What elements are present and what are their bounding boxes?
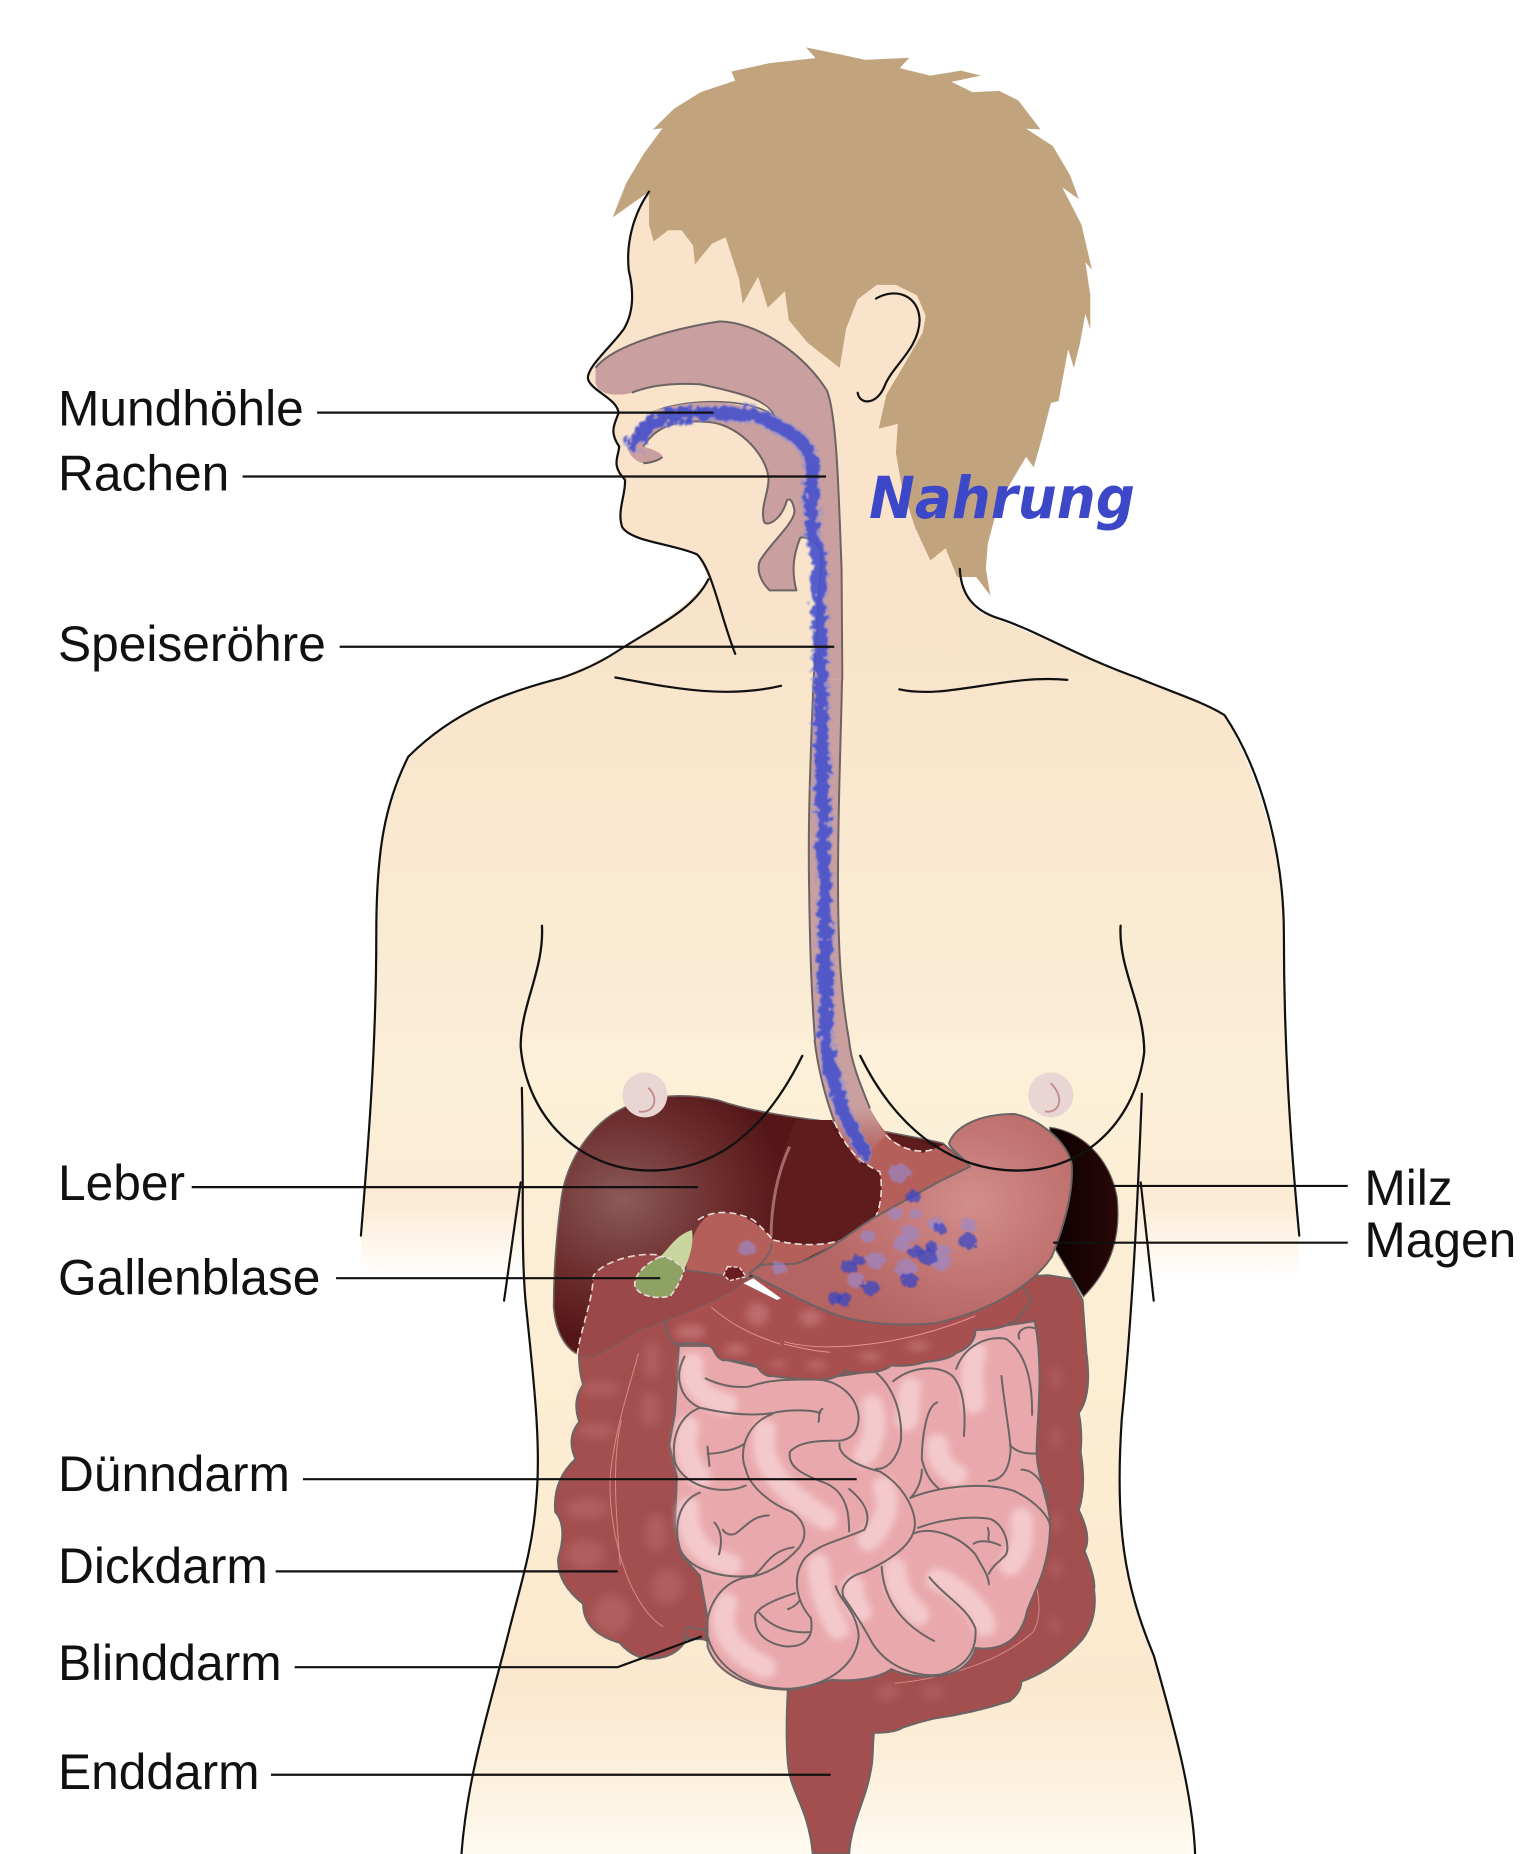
label: Blinddarm: Blinddarm [58,1635,282,1691]
label: Enddarm: Enddarm [58,1744,260,1800]
lower liver lobe [577,1254,747,1357]
large intestine (Dickdarm) and rectum [555,1275,1095,1854]
small intestine (Dünndarm) [669,1321,1050,1690]
labels and leader lines [58,381,1516,1800]
label: Gallenblase: Gallenblase [58,1250,320,1306]
spleen [1050,1127,1118,1297]
mouth, pharynx and esophagus [595,321,849,1040]
label: Rachen: Rachen [58,446,229,502]
label: Mundhöhle: Mundhöhle [58,381,304,437]
stomach (Magen) [743,1114,1072,1325]
transverse colon [665,1268,1031,1380]
lower esophagus [815,1040,886,1163]
hair [613,47,1092,596]
intestine fold lines [674,1327,1050,1689]
body outlines [361,678,1299,1854]
nipples [622,1072,1073,1117]
duodenum seen through liver [686,1108,970,1278]
food (Nahrung) path through mouth and esophagus [634,413,977,1306]
label: Dünndarm: Dünndarm [58,1446,290,1502]
label: Leber: Leber [58,1155,185,1211]
label: Magen: Magen [1364,1212,1516,1268]
right liver lobe shading [771,1120,882,1246]
body: skin fill [361,569,1299,1854]
label: Dickdarm: Dickdarm [58,1538,268,1594]
intestine highlights [686,1353,1022,1667]
appendix stub [683,1627,707,1640]
breast outlines [521,926,1144,1171]
gallbladder (Gallenblase) [635,1230,693,1297]
head: profile, ear and neck outlines [559,192,1140,679]
label: Speiseröhre: Speiseröhre [58,616,326,672]
label: Blinddarm [58,1635,702,1691]
head: face and neck fill [588,192,1038,652]
label: Milz: Milz [1364,1160,1453,1216]
colon highlights [566,1342,1060,1700]
liver (Leber) [554,1040,970,1357]
heading: Nahrung: Nahrung [869,464,1135,532]
